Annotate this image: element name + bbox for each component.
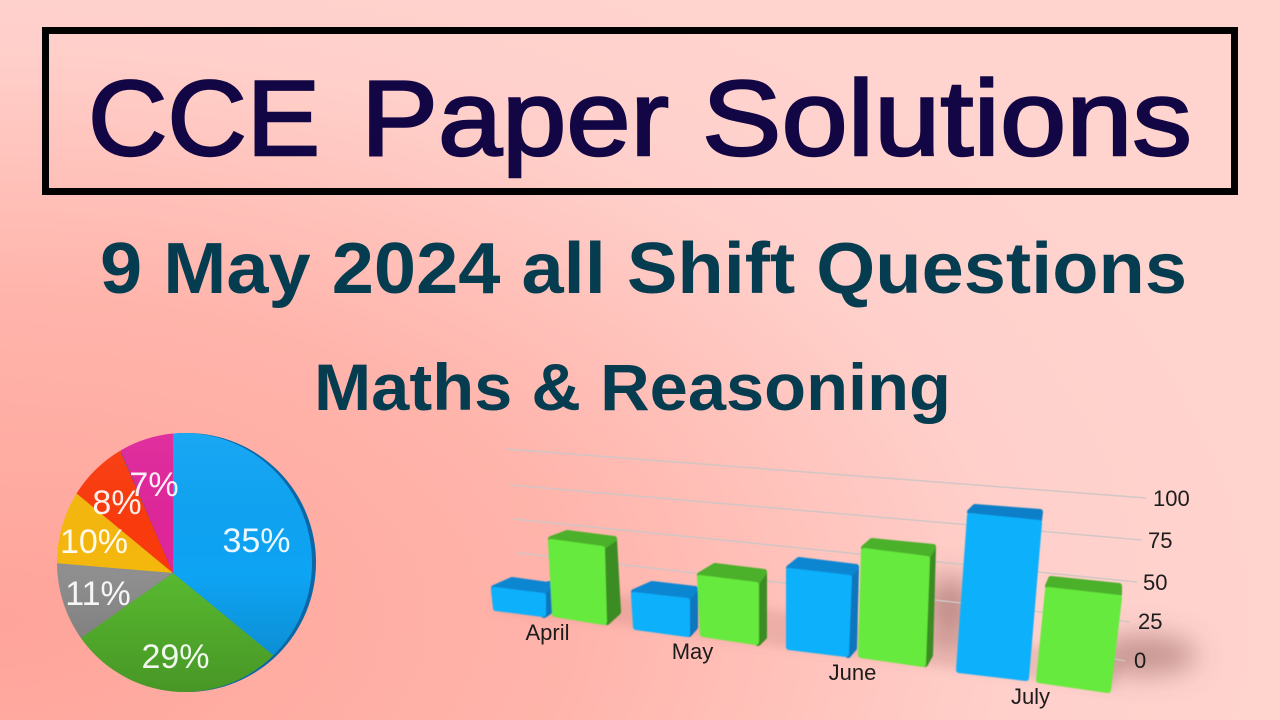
subtitle: subjects: Maths & Reasoning	[314, 350, 951, 424]
bar: April green	[551, 533, 618, 622]
subtitle: date and shifts: 9 May 2024 all Shift Questions	[100, 229, 1187, 309]
pie labels: 35%	[222, 522, 291, 560]
slice: gray 11%	[57, 563, 173, 638]
category labels: July	[1011, 684, 1050, 709]
bar: July blue	[959, 507, 1040, 678]
slice: magenta 7%	[120, 434, 173, 573]
category labels	[525, 620, 1050, 709]
title text: Solutions	[702, 58, 1192, 178]
bar: July green	[1039, 579, 1119, 690]
title text: Paper	[361, 58, 669, 178]
bar: May green	[700, 566, 764, 643]
title text: CCE	[88, 58, 320, 178]
pie chart	[57, 433, 316, 692]
pie labels: 7%	[129, 466, 179, 504]
bar: May blue	[634, 584, 695, 634]
category labels: April	[525, 620, 570, 645]
category labels: June	[829, 660, 876, 685]
category labels: May	[672, 639, 713, 664]
axis values: 25	[1138, 609, 1162, 634]
axis values: 50	[1143, 570, 1167, 595]
pie labels: 8%	[92, 484, 142, 522]
pie labels: 11%	[65, 575, 131, 613]
bar: June green	[861, 541, 933, 664]
chart shadow	[926, 575, 1197, 673]
axis values	[1134, 486, 1190, 673]
slice: red 8%	[76, 450, 173, 573]
pie labels: 29%	[141, 638, 210, 676]
slice: green 29%	[80, 573, 274, 692]
axis values: 100	[1153, 486, 1190, 511]
pie labels	[60, 466, 291, 676]
pie labels: 10%	[60, 523, 128, 561]
bar chart	[494, 449, 1197, 709]
slice: blue 35%	[173, 433, 312, 656]
slice: yellow 10%	[57, 493, 173, 573]
title box	[46, 30, 1234, 192]
axis values: 0	[1134, 648, 1146, 673]
bar: April blue	[494, 580, 550, 615]
axis values: 75	[1148, 528, 1172, 553]
bar: June blue	[789, 560, 856, 655]
